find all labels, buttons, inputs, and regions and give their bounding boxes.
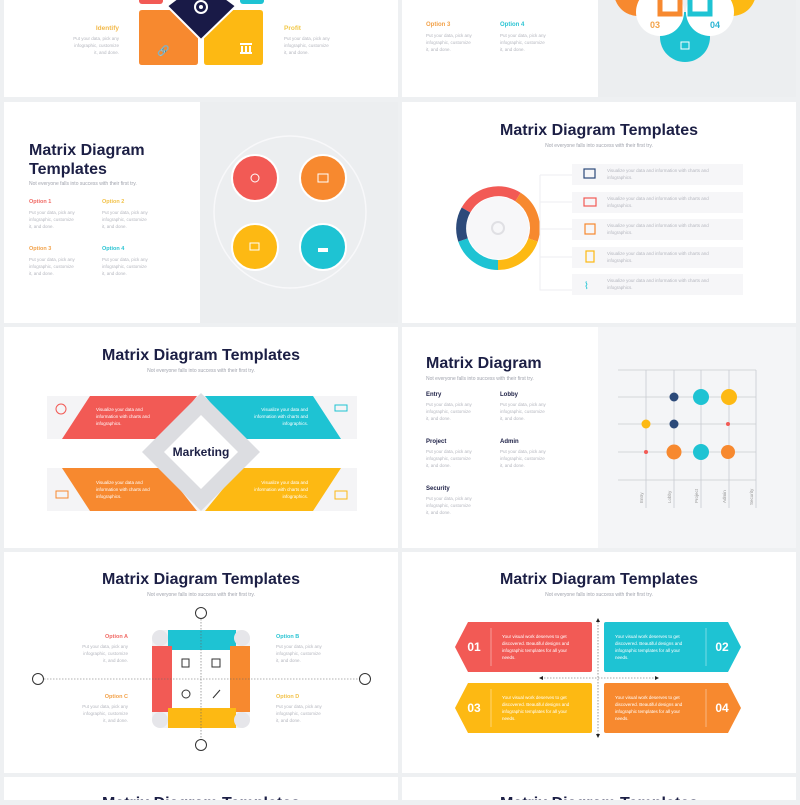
slide: bottom partial left bbox=[4, 777, 398, 805]
yellow segment: information with charts and bbox=[254, 487, 308, 492]
labels: Put your data, pick any bbox=[500, 449, 547, 454]
labels: infographic, customize bbox=[500, 409, 545, 414]
label: Identify bbox=[73, 25, 120, 55]
cycle circles bbox=[214, 136, 366, 288]
options A-D: Option B bbox=[276, 634, 299, 640]
subtitle: Not everyone falls into success with their first try. bbox=[29, 181, 137, 187]
card 04 bbox=[604, 683, 741, 733]
labels: Put your data, pick any bbox=[426, 449, 473, 454]
labels: Project bbox=[426, 439, 446, 445]
icon: bank bbox=[240, 43, 252, 54]
orange segment: infographics. bbox=[96, 494, 122, 499]
options A-D: Option D bbox=[276, 694, 299, 700]
labels: it, and done. bbox=[426, 510, 451, 515]
arrow circles bbox=[32, 608, 370, 750]
options grid: infographic, customize bbox=[102, 264, 147, 269]
cyan segment: information with charts and bbox=[254, 414, 308, 419]
icon: link: 🔗 bbox=[157, 44, 170, 57]
labels: Entry bbox=[426, 392, 442, 398]
options grid: it, and done. bbox=[102, 271, 127, 276]
card 03: discovered. Beautiful designs and bbox=[502, 702, 570, 707]
title: Matrix Diagram bbox=[426, 355, 542, 372]
options grid: Option 1 bbox=[29, 199, 51, 205]
yellow segment: Visualize your data and bbox=[261, 480, 308, 485]
label: Profit: Profit bbox=[284, 25, 302, 32]
connectors bbox=[540, 175, 572, 290]
list rows: infographics. bbox=[607, 175, 633, 180]
title: Templates bbox=[29, 161, 107, 178]
options grid: Option 3 bbox=[29, 246, 51, 252]
orange segment: Visualize your data and bbox=[96, 480, 143, 485]
labels bbox=[426, 392, 547, 515]
dashed arrows bbox=[539, 618, 659, 738]
label: Profit bbox=[284, 25, 331, 55]
subtitle: Not everyone falls into success with their first try. bbox=[147, 368, 255, 374]
list rows: Visualize your data and information with charts and bbox=[607, 196, 709, 201]
card 03: needs. bbox=[502, 716, 516, 721]
yellow segment bbox=[205, 468, 341, 511]
orange tile bbox=[139, 10, 198, 65]
labels: it, and done. bbox=[500, 463, 525, 468]
list rows: Visualize your data and information with charts and bbox=[607, 168, 709, 173]
list rows: infographics. bbox=[607, 203, 633, 208]
donut chart bbox=[461, 191, 535, 265]
red segment: information with charts and bbox=[96, 414, 150, 419]
label: Identify: Put your data, pick any bbox=[73, 36, 120, 41]
title: Matrix Diagram Templates bbox=[102, 571, 300, 588]
card 04: Your visual work deserves to get bbox=[615, 695, 680, 700]
subtitle: Not everyone falls into success with their first try. bbox=[426, 376, 534, 382]
icons bbox=[56, 404, 66, 414]
title: Matrix Diagram Templates bbox=[102, 347, 300, 364]
card 01: infographic templates for all your bbox=[502, 648, 568, 653]
red top tile bbox=[139, 0, 163, 4]
labels: Lobby bbox=[500, 392, 519, 398]
subtitle: Not everyone falls into success with their first try. bbox=[147, 592, 255, 598]
card 01: Your visual work deserves to get bbox=[502, 634, 567, 639]
options 3 and 4 bbox=[426, 22, 547, 52]
card 02: Your visual work deserves to get bbox=[615, 634, 680, 639]
list rows bbox=[572, 164, 743, 295]
list rows: Visualize your data and information with charts and bbox=[607, 251, 709, 256]
cyan segment: Visualize your data and bbox=[261, 407, 308, 412]
square diagram bbox=[152, 630, 250, 728]
options grid bbox=[29, 199, 149, 276]
labels: infographic, customize bbox=[426, 409, 471, 414]
options A-D: Put your data, pick any bbox=[276, 644, 323, 649]
card 02 bbox=[604, 622, 741, 672]
options A-D: it, and done. bbox=[276, 658, 301, 663]
card 02: 02 bbox=[715, 640, 729, 654]
options A-D: Option A bbox=[105, 634, 128, 640]
card 02: discovered. Beautiful designs and bbox=[615, 641, 683, 646]
card 04: discovered. Beautiful designs and bbox=[615, 702, 683, 707]
options 3 and 4: it, and done. bbox=[426, 47, 451, 52]
card 04: 04 bbox=[715, 701, 729, 715]
red segment: infographics. bbox=[96, 421, 122, 426]
cyan segment bbox=[205, 396, 341, 439]
card 01: needs. bbox=[502, 655, 516, 660]
center diamond: Marketing bbox=[173, 445, 229, 459]
label: Profit: it, and done. bbox=[284, 50, 309, 55]
options grid: it, and done. bbox=[29, 271, 54, 276]
slide: marketing bbox=[4, 327, 398, 548]
orange segment bbox=[62, 468, 197, 511]
card 02: needs. bbox=[615, 655, 629, 660]
labels: it, and done. bbox=[426, 463, 451, 468]
options 3 and 4: infographic, customize bbox=[500, 40, 545, 45]
subtitle: Not everyone falls into success with their first try. bbox=[545, 143, 653, 149]
yellow tile bbox=[204, 10, 263, 65]
card 01: discovered. Beautiful designs and bbox=[502, 641, 570, 646]
label: Profit: Put your data, pick any bbox=[284, 36, 331, 41]
bands bbox=[47, 396, 357, 439]
card 03: infographic templates for all your bbox=[502, 709, 568, 714]
navy diamond with gear bbox=[167, 0, 236, 40]
labels: it, and done. bbox=[500, 416, 525, 421]
options A-D: Put your data, pick any bbox=[276, 704, 323, 709]
subtitle: Not everyone falls into success with their first try. bbox=[545, 592, 653, 598]
yellow segment: infographics. bbox=[282, 494, 308, 499]
card 01: 01 bbox=[467, 640, 481, 654]
orange segment: information with charts and bbox=[96, 487, 150, 492]
options A-D: Option C bbox=[105, 694, 128, 700]
options A-D: it, and done. bbox=[103, 658, 128, 663]
slide: numbered cards bbox=[402, 552, 796, 773]
labels: Put your data, pick any bbox=[426, 402, 473, 407]
labels: Admin bbox=[500, 439, 519, 445]
labels: it, and done. bbox=[426, 416, 451, 421]
options 3 and 4: Put your data, pick any bbox=[426, 33, 473, 38]
cyan segment: infographics. bbox=[282, 421, 308, 426]
options 3 and 4: Put your data, pick any bbox=[500, 33, 547, 38]
flower diagram: 03 bbox=[650, 20, 660, 30]
options 3 and 4: Option 4 bbox=[500, 22, 525, 28]
list rows: ⌇ bbox=[584, 281, 589, 292]
bubble chart bbox=[618, 370, 756, 508]
flower diagram bbox=[614, 0, 756, 62]
slide: bottom partial right bbox=[402, 777, 796, 805]
card 03: Your visual work deserves to get bbox=[502, 695, 567, 700]
label: Identify: it, and done. bbox=[94, 50, 119, 55]
slide: square matrix bbox=[4, 552, 398, 773]
options A-D: Put your data, pick any bbox=[82, 644, 129, 649]
list rows: infographics. bbox=[607, 258, 633, 263]
label: Identify: infographic, customize bbox=[74, 43, 119, 48]
label: Profit: infographic, customize bbox=[284, 43, 329, 48]
title: Matrix Diagram bbox=[29, 142, 145, 159]
title: Matrix Diagram Templates bbox=[500, 571, 698, 588]
labels: infographic, customize bbox=[426, 503, 471, 508]
bubble chart: Project bbox=[694, 488, 699, 503]
slide: donut list bbox=[402, 102, 796, 323]
bubble chart: Security bbox=[749, 488, 754, 505]
labels: infographic, customize bbox=[500, 456, 545, 461]
bubble chart: Admin bbox=[722, 490, 727, 503]
card 03 bbox=[455, 683, 592, 733]
options A-D: infographic, customize bbox=[276, 651, 321, 656]
labels: Security bbox=[426, 486, 450, 492]
labels: Put your data, pick any bbox=[500, 402, 547, 407]
options 3 and 4: Option 3 bbox=[426, 22, 451, 28]
center diamond bbox=[142, 393, 260, 511]
options grid: Put your data, pick any bbox=[102, 257, 149, 262]
slide: options circles bbox=[4, 102, 398, 323]
red segment: Visualize your data and bbox=[96, 407, 143, 412]
options grid: infographic, customize bbox=[29, 264, 74, 269]
options grid: it, and done. bbox=[29, 224, 54, 229]
card 04: infographic templates for all your bbox=[615, 709, 681, 714]
list rows: Visualize your data and information with charts and bbox=[607, 223, 709, 228]
options A-D bbox=[82, 634, 323, 723]
label: Identify: Identify bbox=[96, 25, 119, 32]
options A-D: infographic, customize bbox=[83, 651, 128, 656]
title: Matrix Diagram Templates bbox=[500, 122, 698, 139]
options 3 and 4: it, and done. bbox=[500, 47, 525, 52]
title bbox=[29, 142, 145, 178]
options A-D: infographic, customize bbox=[83, 711, 128, 716]
labels: infographic, customize bbox=[426, 456, 471, 461]
options grid: Option 2 bbox=[102, 199, 124, 205]
options A-D: infographic, customize bbox=[276, 711, 321, 716]
options grid: Put your data, pick any bbox=[29, 257, 76, 262]
options grid: Option 4 bbox=[102, 246, 125, 252]
card 03: 03 bbox=[467, 701, 481, 715]
options grid: it, and done. bbox=[102, 224, 127, 229]
list rows: infographics. bbox=[607, 285, 633, 290]
options grid: infographic, customize bbox=[29, 217, 74, 222]
card 01 bbox=[455, 622, 592, 672]
red segment bbox=[62, 396, 197, 439]
options grid: Put your data, pick any bbox=[102, 210, 149, 215]
flower diagram: 04 bbox=[710, 20, 720, 30]
options 3 and 4: infographic, customize bbox=[426, 40, 471, 45]
card 04: needs. bbox=[615, 716, 629, 721]
labels: Put your data, pick any bbox=[426, 496, 473, 501]
card 02: infographic templates for all your bbox=[615, 648, 681, 653]
cyan top tile bbox=[240, 0, 264, 4]
list rows: Visualize your data and information with charts and bbox=[607, 278, 709, 283]
slide: bubble matrix bbox=[402, 327, 796, 548]
options A-D: it, and done. bbox=[103, 718, 128, 723]
slide: top-left partial bbox=[4, 0, 398, 97]
options A-D: it, and done. bbox=[276, 718, 301, 723]
options A-D: Put your data, pick any bbox=[82, 704, 129, 709]
bubble chart: Lobby bbox=[667, 490, 672, 503]
bubble chart: Entry bbox=[639, 492, 644, 503]
slide: top-right partial bbox=[402, 0, 796, 97]
options grid: infographic, customize bbox=[102, 217, 147, 222]
dashed axes bbox=[44, 619, 359, 739]
list rows: infographics. bbox=[607, 230, 633, 235]
options grid: Put your data, pick any bbox=[29, 210, 76, 215]
